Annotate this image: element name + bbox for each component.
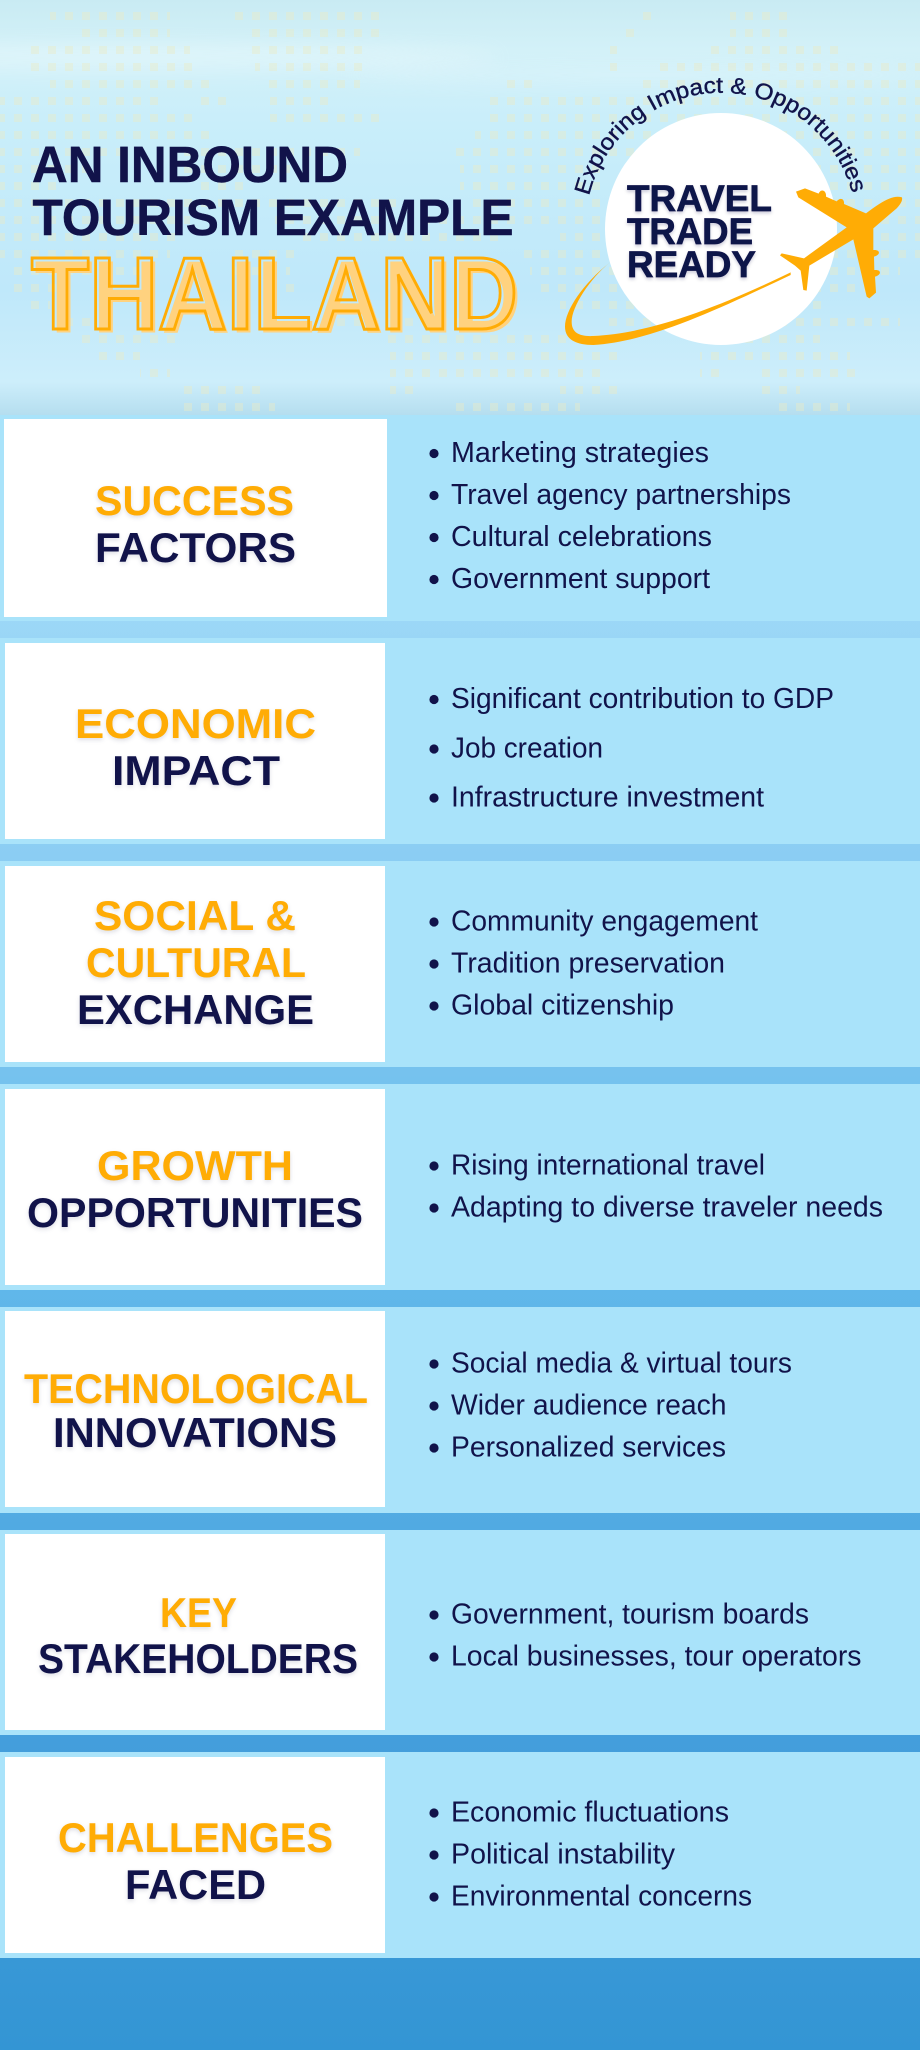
panel: success factors: FACTORS [95,524,296,571]
panel: social and cultural exchange: EXCHANGE [77,986,314,1033]
panel: success factors: Government support [451,563,710,595]
panel: key stakeholders: Local businesses, tour operators [451,1640,862,1672]
panel: challenges faced: FACED [125,1861,266,1908]
logo: Travel Trade Ready: READY [627,243,756,285]
panel: technological innovations: Personalized services [451,1432,726,1464]
panel: challenges faced [0,1752,920,1958]
panel: growth opportunities: GROWTH [97,1142,293,1189]
panel: economic impact: Infrastructure investment [451,782,764,814]
panel: challenges faced: Environmental concerns [451,1880,752,1912]
panel: social and cultural exchange: Global citizenship [451,990,674,1022]
logo: Travel Trade Ready [565,78,902,345]
title: AN INBOUND [32,136,348,193]
panel: technological innovations: TECHNOLOGICAL [24,1365,368,1412]
panel: challenges faced: Economic fluctuations [451,1796,729,1828]
title: Thailand outlined: THAILAND [31,236,518,351]
panel: social and cultural exchange: CULTURAL [86,939,306,986]
panel: economic impact: IMPACT [112,747,280,794]
panel: success factors: Travel agency partnerships [451,479,791,511]
panel: growth opportunities [0,1084,920,1290]
panel: social and cultural exchange [0,861,920,1067]
panel: social and cultural exchange: SOCIAL & [94,892,296,939]
header background with world map dots [0,0,920,415]
panel: economic impact [0,638,920,844]
panel: key stakeholders [0,1530,920,1735]
title: TOURISM EXAMPLE [32,189,514,246]
panel: challenges faced: CHALLENGES [58,1814,333,1861]
panel: growth opportunities: Rising international travel [451,1150,765,1182]
logo: Travel Trade Ready: TRADE [627,210,753,252]
panel: growth opportunities: OPPORTUNITIES [27,1189,363,1236]
page background gradient [0,415,920,2050]
panel: technological innovations: Social media & virtual tours [451,1348,792,1380]
title: Thailand outlined: THAILAND [34,240,522,354]
panel: growth opportunities: Adapting to diverse traveler needs [451,1192,883,1224]
logo: Travel Trade Ready: TRAVEL [627,177,772,219]
panel: success factors: Marketing strategies [451,437,709,469]
panel: technological innovations [0,1307,920,1513]
panel: technological innovations: INNOVATIONS [53,1409,337,1456]
panel: economic impact: ECONOMIC [75,700,316,747]
panel: key stakeholders: STAKEHOLDERS [38,1635,358,1682]
panel: key stakeholders: KEY [160,1589,237,1636]
panel: economic impact: Job creation [451,732,603,764]
panel: social and cultural exchange: Tradition preservation [451,948,725,980]
logo: Travel Trade Ready: Exploring Impact & Opportunities [574,78,863,194]
panel: economic impact: Significant contribution to GDP [451,683,834,715]
panel: key stakeholders: Government, tourism boards [451,1598,809,1630]
panel: success factors: SUCCESS [95,477,294,524]
panel: success factors: Cultural celebrations [451,521,712,553]
panel: success factors [0,415,920,621]
title [32,136,514,246]
panel: challenges faced: Political instability [451,1838,676,1870]
panel: social and cultural exchange: Community engagement [451,906,758,938]
panel: technological innovations: Wider audience reach [451,1390,726,1422]
